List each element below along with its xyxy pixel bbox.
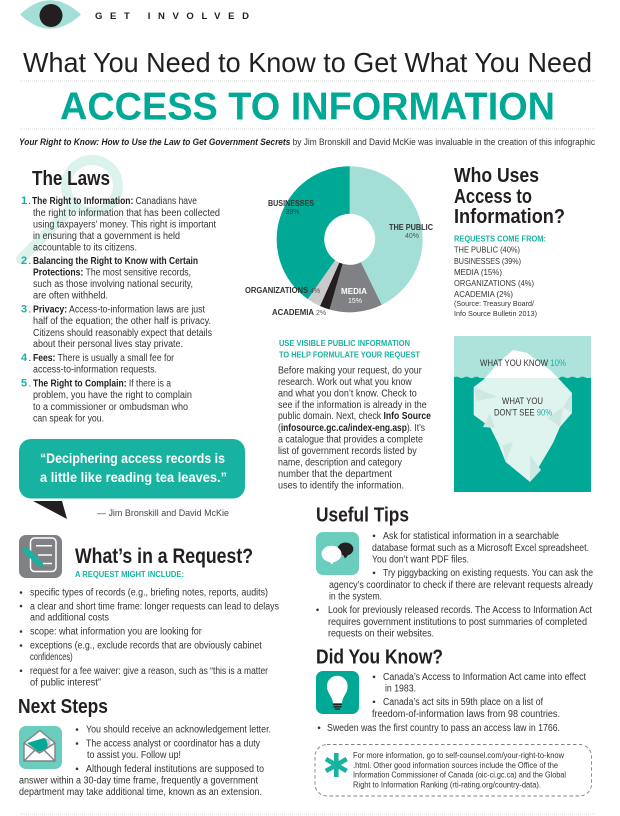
tips text: You don’t want PDF files.: [372, 555, 469, 566]
label: businesses: BUSINESSES: [268, 199, 315, 208]
law 5: problem, you have the right to complain: [33, 390, 192, 401]
law 4: [21, 352, 175, 376]
law 3: 3: [21, 304, 27, 316]
title line: What You Need to Know to Get What You Need: [23, 47, 592, 78]
quote attribution: — Jim Bronskill and David McKie: [97, 508, 229, 519]
law 3: Citizens should reasonably expect that details: [33, 328, 212, 339]
bullet list: a clear and short time frame: longer requests can lead to delays: [30, 601, 279, 612]
law 4: 4: [21, 352, 28, 364]
body text: see if the information is already in the: [278, 400, 427, 411]
next steps text: answer within a 30-day time frame, frequently a government: [19, 776, 258, 787]
list of requesters: (Source: Treasury Board/: [454, 299, 535, 308]
law 1: 1: [21, 195, 27, 207]
callout text: [353, 751, 566, 790]
tips text: Look for previously released records. The Access to Information Act: [328, 605, 592, 616]
panel: what's in a request: [19, 535, 279, 688]
label: the public: 40%: [405, 233, 419, 240]
quote callout: a little like reading tea leaves.”: [40, 469, 227, 485]
law 5: The Right to Complain: If there is a: [33, 379, 172, 390]
body text: list of government records listed by: [278, 446, 417, 457]
law 1: in ensuring that a government is held: [33, 231, 180, 242]
label: media: 15%: [348, 298, 362, 305]
list of requesters: ORGANIZATIONS (4%): [454, 278, 534, 288]
facts text: Canada’s act sits in 59th place on a list of: [383, 697, 543, 708]
next steps text: department may take additional time, known as an extension.: [19, 787, 262, 798]
bullet list: of public interest”: [30, 677, 101, 688]
body text: and what you don’t know. Check to: [278, 389, 417, 400]
label: academia: 2%: [316, 310, 326, 317]
panel: public information: [278, 339, 432, 492]
law 2: such as those involving national security,: [33, 279, 193, 290]
subtitle credit: Your Right to Know: How to Use the Law to Get Government Secrets by Jim Bronskill and David McKie was invaluable in the creation of this infographic: [19, 137, 595, 147]
bullet list: request for a fee waiver: give a reason, such as “this is a matter: [30, 666, 269, 677]
law 1: using taxpayers’ money. This right is important: [33, 220, 216, 230]
icon: form and pen: [19, 535, 62, 578]
heading: the laws: The Laws: [32, 168, 110, 190]
list of requesters: MEDIA (15%): [454, 267, 502, 277]
tips text: agency’s coordinator to check if there are relevant requests already: [329, 580, 593, 591]
law 3: .: [28, 305, 31, 316]
tips text: [316, 531, 593, 640]
heading: useful tips: Useful Tips: [316, 505, 409, 527]
label: what you don't see: WHAT YOU: [502, 396, 543, 406]
icon: light bulb: [316, 671, 359, 714]
law 1: the right to information that has been collected: [33, 208, 220, 219]
law 2: .: [28, 256, 31, 267]
facts text: Sweden was the first country to pass an access law in 1766.: [327, 723, 560, 734]
label: academia: ACADEMIA: [272, 308, 314, 317]
facts text: in 1983.: [385, 684, 416, 695]
list of requesters: BUSINESSES (39%): [454, 256, 521, 266]
facts text: Canada’s Access to Information Act came into effect: [383, 672, 586, 683]
bullet list: and additional costs: [30, 613, 109, 624]
icon: asterisk: [326, 753, 347, 777]
label: what you don't see: [494, 396, 552, 418]
law 4: access-to-information requests.: [33, 365, 157, 376]
law 3: [21, 304, 212, 350]
law 3: about their personal lives stay private.: [33, 339, 183, 350]
law 2: [21, 255, 198, 302]
body text: Before making your request, do your: [278, 366, 422, 377]
tips text: requests on their websites.: [328, 629, 434, 640]
heading: who uses: Information?: [454, 205, 565, 228]
heading: did you know: Did You Know?: [316, 646, 443, 668]
subheading: [279, 339, 420, 360]
panel: useful tips: [316, 505, 593, 640]
law 5: can speak for you.: [33, 414, 104, 425]
panel: who uses access: [454, 164, 565, 318]
next steps text: to assist you. Follow up!: [87, 750, 181, 761]
body text: a catalogue that provides a complete: [278, 435, 423, 446]
law 1: accountable to its citizens.: [33, 242, 137, 254]
tips text: database format such as a Microsoft Excel spreadsheet.: [372, 543, 589, 554]
next steps text: [19, 725, 271, 798]
heading: next steps: Next Steps: [18, 696, 108, 718]
law 1: .: [28, 196, 31, 207]
law 2: 2: [21, 255, 27, 267]
label: media: [341, 287, 367, 305]
list of requesters: [454, 245, 537, 318]
law 3: Privacy: Access-to-information laws are just: [33, 305, 205, 316]
panel: the laws: [21, 160, 220, 425]
label: organizations: ORGANIZATIONS: [245, 286, 309, 295]
facts text: [318, 672, 586, 734]
label: what you know: WHAT YOU KNOW 10%: [480, 358, 566, 368]
label: the public: THE PUBLIC: [389, 223, 433, 232]
next steps text: The access analyst or coordinator has a duty: [86, 739, 260, 750]
label: businesses: [268, 199, 315, 216]
law 4: Fees: There is usually a small fee for: [33, 353, 175, 364]
next steps text: Although federal institutions are supposed to: [86, 764, 264, 775]
body text: research. Work out what you know: [278, 377, 413, 388]
panel: did you know: [316, 646, 586, 734]
law 2: Balancing the Right to Know with Certain: [33, 256, 198, 267]
donut chart: requests by group: [245, 166, 433, 317]
bullet list: specific types of records (e.g., briefing notes, reports, audits): [30, 588, 268, 599]
list of requesters: Info Source Bulletin 2013): [454, 309, 537, 318]
list of requesters: ACADEMIA (2%): [454, 289, 513, 299]
callout text: Information Commissioner of Canada (oic-ci.gc.ca) and the Global: [353, 771, 566, 780]
label: businesses: 39%: [286, 209, 300, 216]
subheading: A REQUEST MIGHT INCLUDE:: [75, 570, 184, 579]
panel: next steps: [18, 696, 271, 798]
iceberg graphic: [454, 336, 591, 492]
body text: number that the department: [278, 469, 392, 480]
body text: uses to identify the information.: [278, 481, 404, 492]
callout text: For more information, go to self-counsel.com/your-right-to-know: [353, 751, 564, 760]
label: the public: [389, 223, 433, 240]
label: media: MEDIA: [341, 287, 367, 296]
heading: who uses: [454, 164, 565, 228]
law 5: 5: [21, 378, 27, 390]
law 3: half of the equation; the other half is privacy.: [33, 316, 211, 327]
callout text: Right to Information Ranking (rti-rating.org/country-data).: [353, 781, 541, 790]
tips text: Try piggybacking on existing requests. You can ask the: [383, 568, 593, 579]
law 5: .: [28, 379, 31, 390]
icon: speech bubbles: [316, 532, 359, 575]
subheading: USE VISIBLE PUBLIC INFORMATION: [279, 339, 410, 348]
heading: what's in a request: What’s in a Request?: [75, 545, 253, 568]
law 2: Protections: The most sensitive records,: [33, 268, 191, 279]
tips text: requires government institutions to post summaries of completed: [328, 617, 587, 628]
next steps text: You should receive an acknowledgement letter.: [86, 725, 271, 736]
bullet list: [20, 588, 279, 688]
label: organizations: 4%: [310, 288, 320, 295]
callout: more information: [315, 744, 592, 796]
label: what you don't see: DON’T SEE 90%: [494, 408, 552, 418]
quote callout: “Deciphering access records is: [40, 450, 225, 466]
law 1: The Right to Information: Canadians have: [32, 196, 197, 207]
law 4: .: [28, 353, 31, 364]
body text: [278, 366, 432, 492]
law 5: [21, 378, 192, 425]
heading: who uses: Who Uses: [454, 164, 539, 187]
subheading: TO HELP FORMULATE YOUR REQUEST: [279, 351, 420, 360]
law 1: [21, 195, 220, 254]
quote callout: [19, 439, 245, 519]
main title: ACCESS TO INFORMATION: [60, 86, 555, 128]
icon: magnifier watermark: [21, 160, 118, 259]
header label: GET INVOLVED: [95, 11, 249, 22]
bullet list: exceptions (e.g., exclude records that are obviously cabinet: [30, 641, 262, 652]
subheading: REQUESTS COME FROM:: [454, 235, 546, 244]
icon: eye: [20, 0, 81, 29]
facts text: freedom-of-information laws from 98 countries.: [372, 709, 560, 720]
bullet list: confidences): [30, 652, 73, 663]
law 5: to a commissioner or ombudsman who: [33, 402, 188, 413]
callout text: .html. Other good information sources include the Office of the: [353, 761, 559, 770]
body text: public domain. Next, check Info Source: [278, 411, 432, 422]
bullet list: scope: what information you are looking for: [30, 627, 202, 638]
heading: who uses: Access to: [454, 185, 532, 208]
body text: (infosource.gc.ca/index-eng.asp). It’s: [278, 423, 425, 434]
list of requesters: THE PUBLIC (40%): [454, 245, 520, 255]
body text: name, description and category: [278, 458, 402, 469]
law 2: are often withheld.: [33, 290, 108, 302]
tips text: Ask for statistical information in a searchable: [383, 531, 559, 542]
tips text: in the system.: [329, 592, 382, 603]
icon: envelope: [19, 726, 62, 769]
